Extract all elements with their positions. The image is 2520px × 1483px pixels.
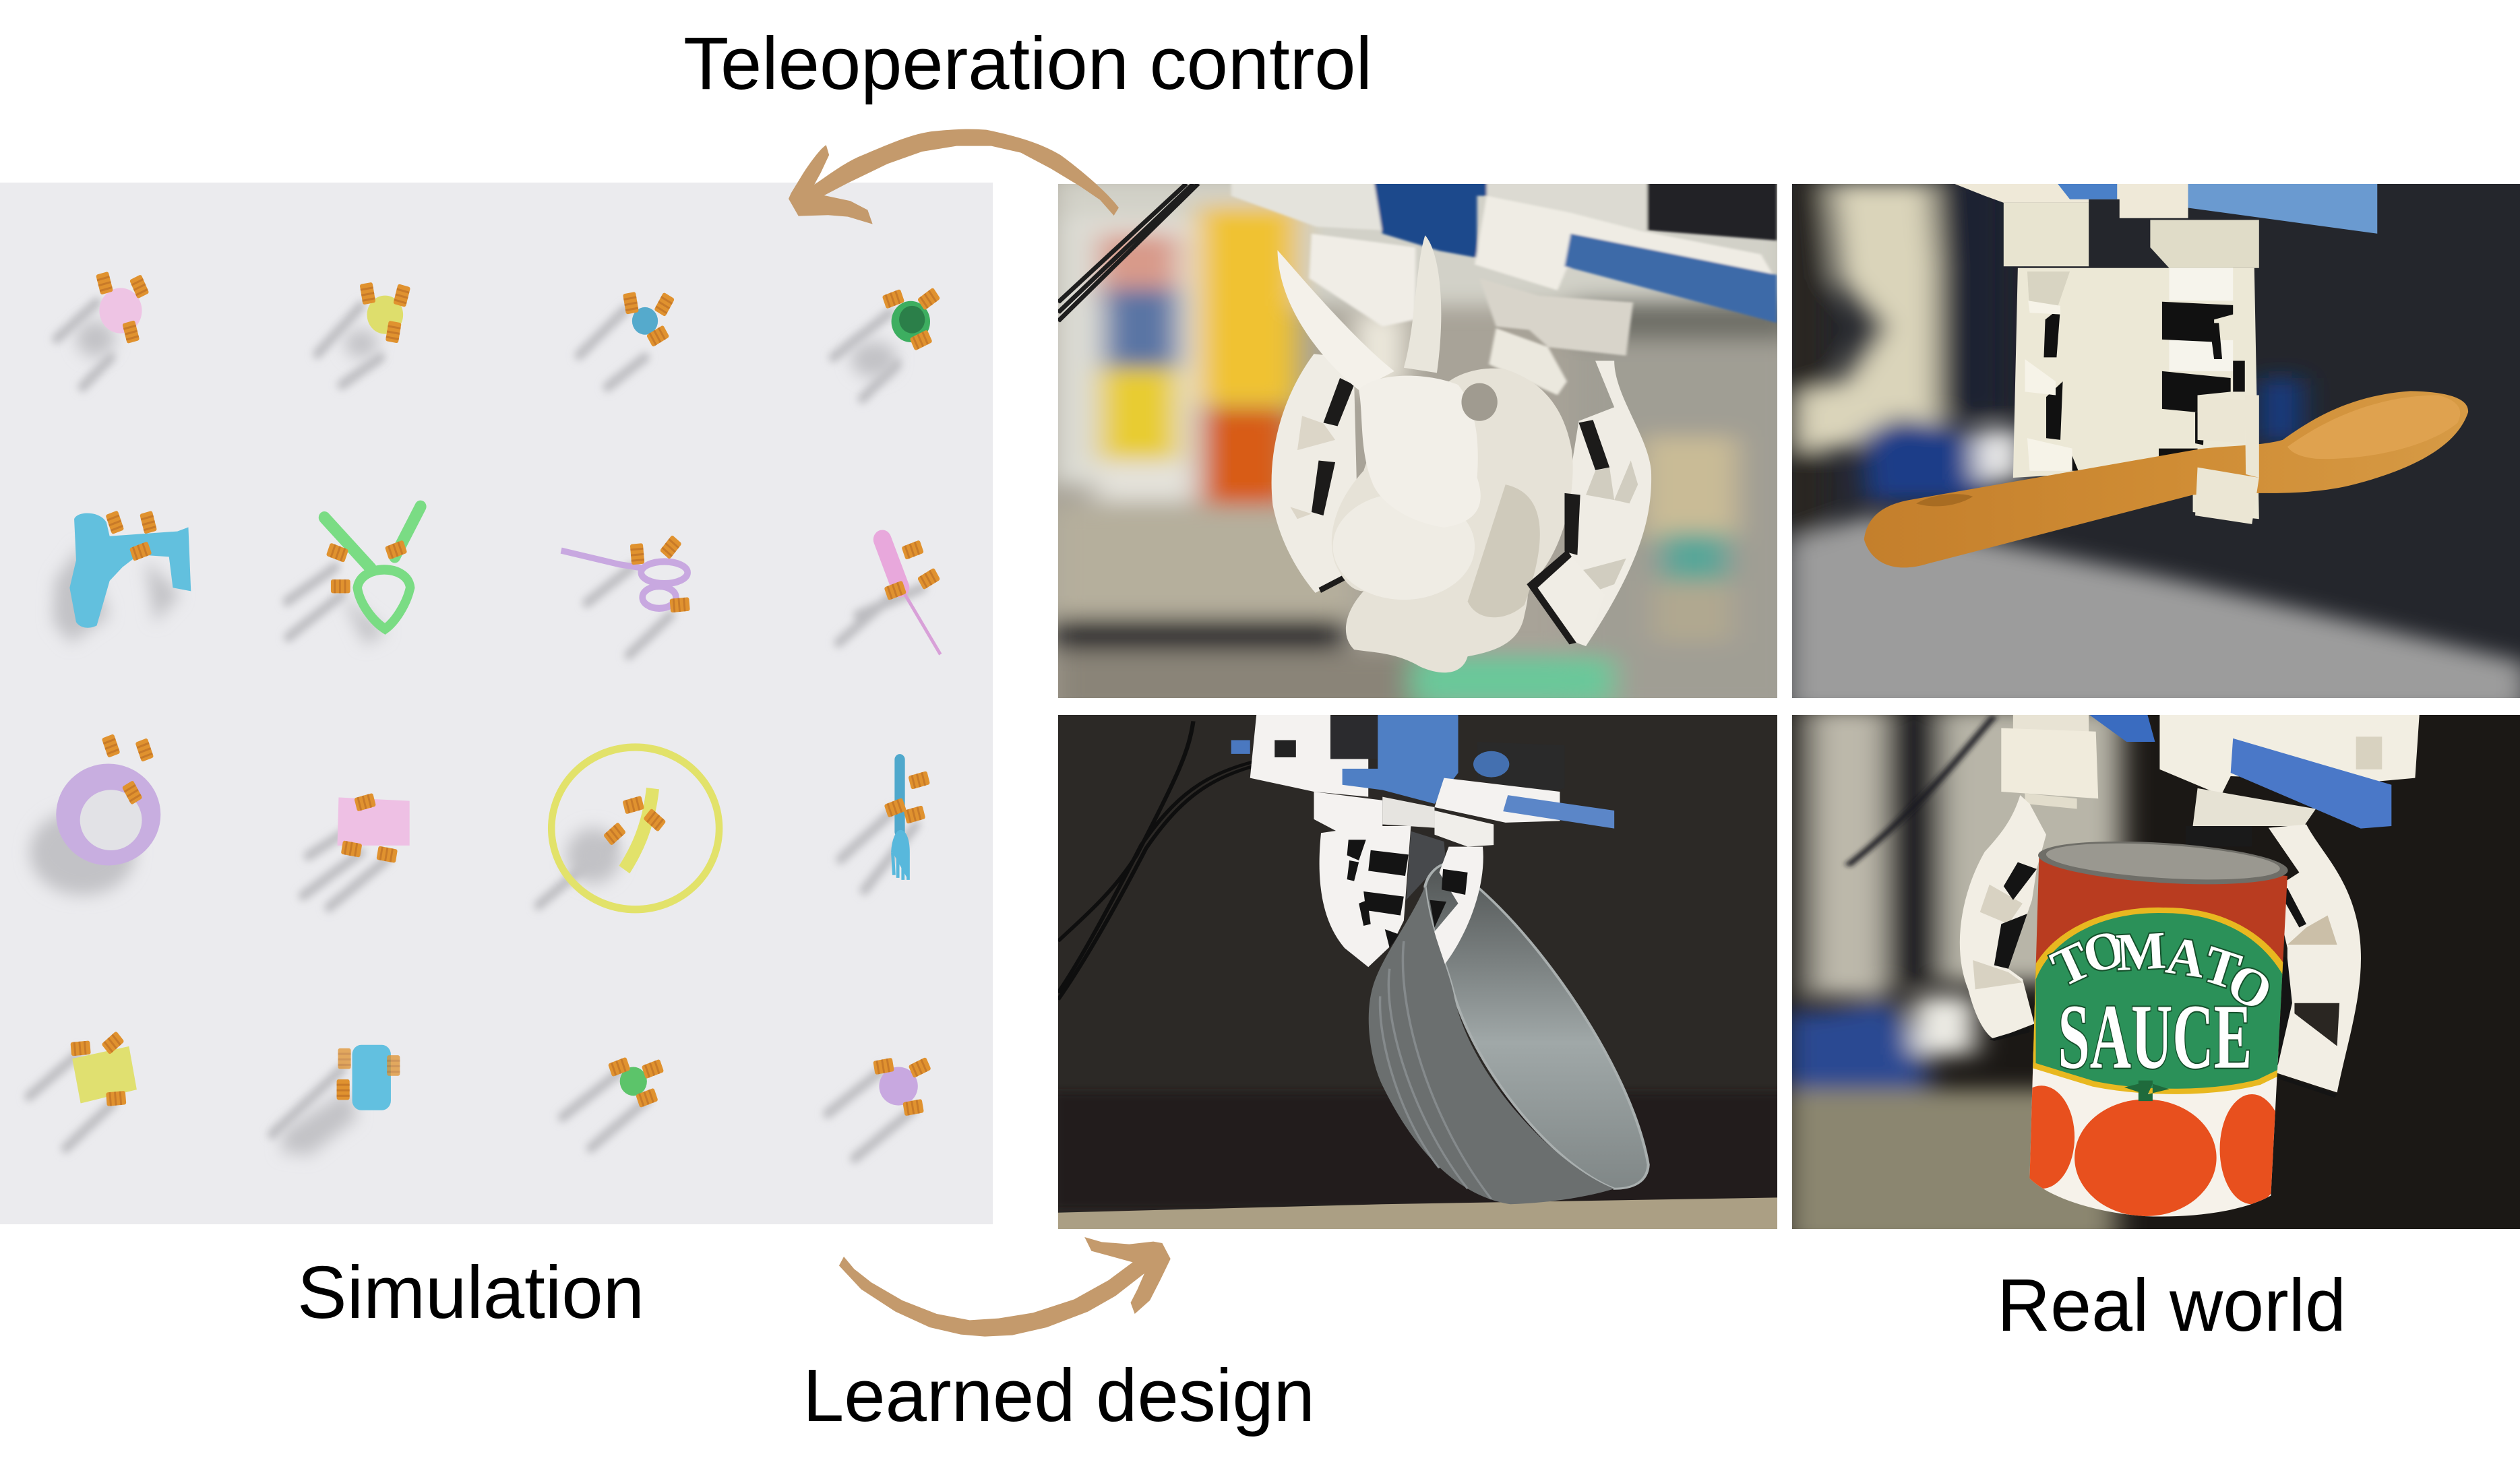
cables <box>1058 721 1252 1000</box>
table and floor <box>1051 1092 1793 1237</box>
bunny <box>1277 235 1573 672</box>
left finger <box>1272 354 1359 593</box>
right finger <box>1430 847 1483 966</box>
object: lilac scissors <box>561 535 690 612</box>
object: green clamp <box>324 507 421 629</box>
left finger <box>1960 795 2046 1041</box>
bowl outer wall <box>1369 886 1614 1204</box>
right finger <box>2269 824 2361 1098</box>
photo: gripper holding tomato sauce can <box>1786 707 2520 1247</box>
object: lilac sphere <box>873 1057 931 1116</box>
blurred background <box>1786 707 2122 1247</box>
object: green sphere <box>608 1057 664 1108</box>
bowl interior <box>1425 864 1649 1189</box>
robot body <box>1933 175 2377 519</box>
object: yellow hoop and banana <box>551 747 719 910</box>
cable <box>1847 716 1994 866</box>
finger tip over spoon <box>2195 468 2259 524</box>
heading: Real world: Real world <box>1997 1264 2346 1347</box>
object: yellow square <box>70 1031 137 1106</box>
photo: gripper holding bunny <box>1051 175 1799 718</box>
object: blue fork <box>884 759 930 880</box>
tomato sauce can <box>2008 835 2306 1223</box>
object: pink plate <box>338 793 410 863</box>
can label text: TOMATO <box>2043 918 2281 1023</box>
object: pink sphere <box>96 272 149 344</box>
object shadows <box>29 303 923 1158</box>
can label text: SAUCE <box>2058 985 2252 1088</box>
robot mount <box>2001 707 2420 847</box>
blurred background <box>1051 175 1799 718</box>
panel: simulation grid of objects <box>0 183 993 1224</box>
photo: gripper holding grey bowl <box>1051 707 1793 1237</box>
object: green cup <box>882 288 940 351</box>
robot mount <box>1231 175 1777 396</box>
robot mount <box>1231 707 1614 900</box>
object: purple ring <box>56 734 160 865</box>
object: yellow sphere <box>360 282 410 343</box>
finger pads over bunny <box>1527 493 1580 644</box>
photo: gripper holding wooden spoon <box>1786 175 2520 714</box>
left and middle fingers <box>1320 826 1411 967</box>
object: pink screwdriver <box>882 540 940 654</box>
blurred background <box>1786 175 2520 714</box>
heading: Learned design: Learned design <box>803 1354 1315 1437</box>
title: Teleoperation control: Teleoperation control <box>683 22 1372 105</box>
object: blue drill <box>69 510 191 628</box>
object: blue sphere <box>623 292 675 347</box>
velcro pads <box>2043 302 2245 471</box>
right finger <box>1565 361 1651 646</box>
object: blue can <box>337 1045 400 1110</box>
can label text <box>2043 918 2281 1088</box>
wooden spoon <box>1864 391 2468 567</box>
arrow: learned design, from simulation to photo <box>839 1237 1171 1337</box>
cables <box>1058 184 1198 321</box>
arrow: teleoperation, from photo to simulation <box>789 129 1119 224</box>
heading: Simulation: Simulation <box>297 1251 644 1334</box>
